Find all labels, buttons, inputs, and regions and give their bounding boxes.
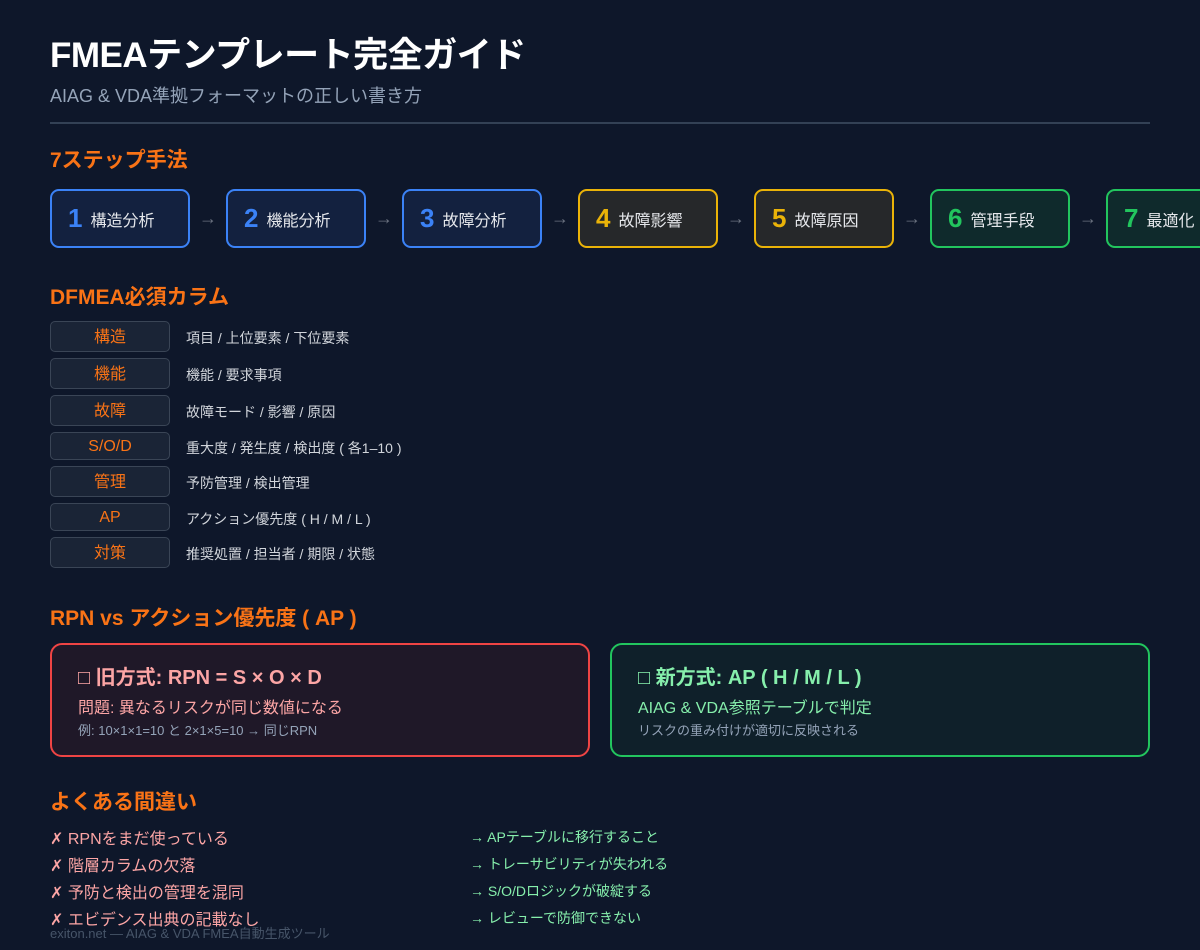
row 機能	[50, 358, 170, 389]
step 5	[754, 189, 894, 248]
panel: new AP: □ 新方式: AP ( H / M / L )	[638, 667, 862, 689]
panel: old RPN: 問題: 異なるリスクが同じ数値になる	[78, 700, 343, 717]
arrow: →	[1079, 208, 1097, 228]
column table: 重大度 / 発生度 / 検出度 ( 各1–10 )	[186, 440, 401, 456]
mistakes list: → APテーブルに移行すること	[470, 829, 659, 845]
step 4	[578, 189, 718, 248]
arrow: →	[727, 208, 745, 228]
row AP	[50, 503, 170, 531]
step 7: 7	[1124, 203, 1138, 233]
row AP: AP	[99, 509, 121, 526]
mistakes list: → トレーサビリティが失われる	[470, 856, 668, 872]
heading: common mistakes: よくある間違い	[50, 791, 197, 814]
step 5: 故障原因	[794, 212, 858, 230]
mistakes list: → レビューで防御できない	[470, 910, 641, 926]
step 6	[930, 189, 1070, 248]
row 故障	[50, 395, 170, 426]
heading: RPN vs AP: RPN vs アクション優先度 ( AP )	[50, 607, 357, 630]
mistakes list: → S/O/Dロジックが破綻する	[470, 883, 652, 899]
step 2: 2	[244, 203, 258, 233]
row 故障: 故障	[94, 403, 126, 420]
row 構造: 構造	[94, 329, 126, 346]
panel: old RPN	[50, 643, 590, 757]
panel: new AP	[610, 643, 1150, 757]
arrow: →	[903, 208, 921, 228]
row SOD	[50, 432, 170, 460]
panel: new AP: AIAG & VDA参照テーブルで判定	[638, 700, 872, 717]
step 5: 5	[772, 203, 786, 233]
panel: old RPN: 例: 10×1×1=10 と 2×1×5=10 → 同じRPN	[78, 723, 317, 738]
row 対策	[50, 537, 170, 568]
mistakes list	[50, 829, 668, 929]
column table: 機能 / 要求事項	[186, 367, 282, 383]
row SOD: S/O/D	[88, 438, 132, 455]
title: FMEAテンプレート完全ガイド	[50, 36, 526, 75]
step flow	[50, 189, 1200, 248]
step 2: 機能分析	[266, 212, 330, 230]
column table: 予防管理 / 検出管理	[186, 475, 310, 491]
step 3: 故障分析	[442, 212, 506, 230]
mistakes list: ✗ エビデンス出典の記載なし	[50, 912, 260, 929]
column table: 推奨処置 / 担当者 / 期限 / 状態	[186, 546, 375, 562]
heading: 7 steps: 7ステップ手法	[50, 149, 188, 172]
mistakes list: ✗ 階層カラムの欠落	[50, 858, 195, 875]
step 1: 1	[68, 203, 82, 233]
step 7	[1106, 189, 1200, 248]
panel: old RPN: □ 旧方式: RPN = S × O × D	[78, 667, 322, 689]
step 6: 管理手段	[970, 212, 1034, 230]
arrow: →	[551, 208, 569, 228]
step 6: 6	[948, 203, 962, 233]
step 1: 構造分析	[90, 212, 154, 230]
row 管理	[50, 466, 170, 497]
subtitle: AIAG & VDA準拠フォーマットの正しい書き方	[50, 86, 422, 106]
column table: 項目 / 上位要素 / 下位要素	[186, 330, 349, 346]
step 3: 3	[420, 203, 434, 233]
mistakes list: ✗ RPNをまだ使っている	[50, 831, 229, 848]
step 4: 故障影響	[618, 212, 682, 230]
column table: アクション優先度 ( H / M / L )	[186, 511, 371, 527]
row 機能: 機能	[94, 366, 126, 383]
column table	[50, 321, 401, 568]
arrow: →	[375, 208, 393, 228]
arrow: →	[199, 208, 217, 228]
row 対策: 対策	[94, 545, 126, 562]
step 7: 最適化	[1146, 212, 1194, 230]
mistakes list: ✗ 予防と検出の管理を混同	[50, 885, 244, 902]
heading: DFMEA columns: DFMEA必須カラム	[50, 286, 229, 309]
step 1	[50, 189, 190, 248]
step 2	[226, 189, 366, 248]
step 3	[402, 189, 542, 248]
row 管理: 管理	[94, 474, 126, 491]
step 4: 4	[596, 203, 610, 233]
footer: exiton.net — AIAG & VDA FMEA自動生成ツール	[50, 926, 330, 941]
column table: 故障モード / 影響 / 原因	[186, 404, 335, 420]
row 構造	[50, 321, 170, 352]
panel: new AP: リスクの重み付けが適切に反映される	[638, 723, 859, 738]
